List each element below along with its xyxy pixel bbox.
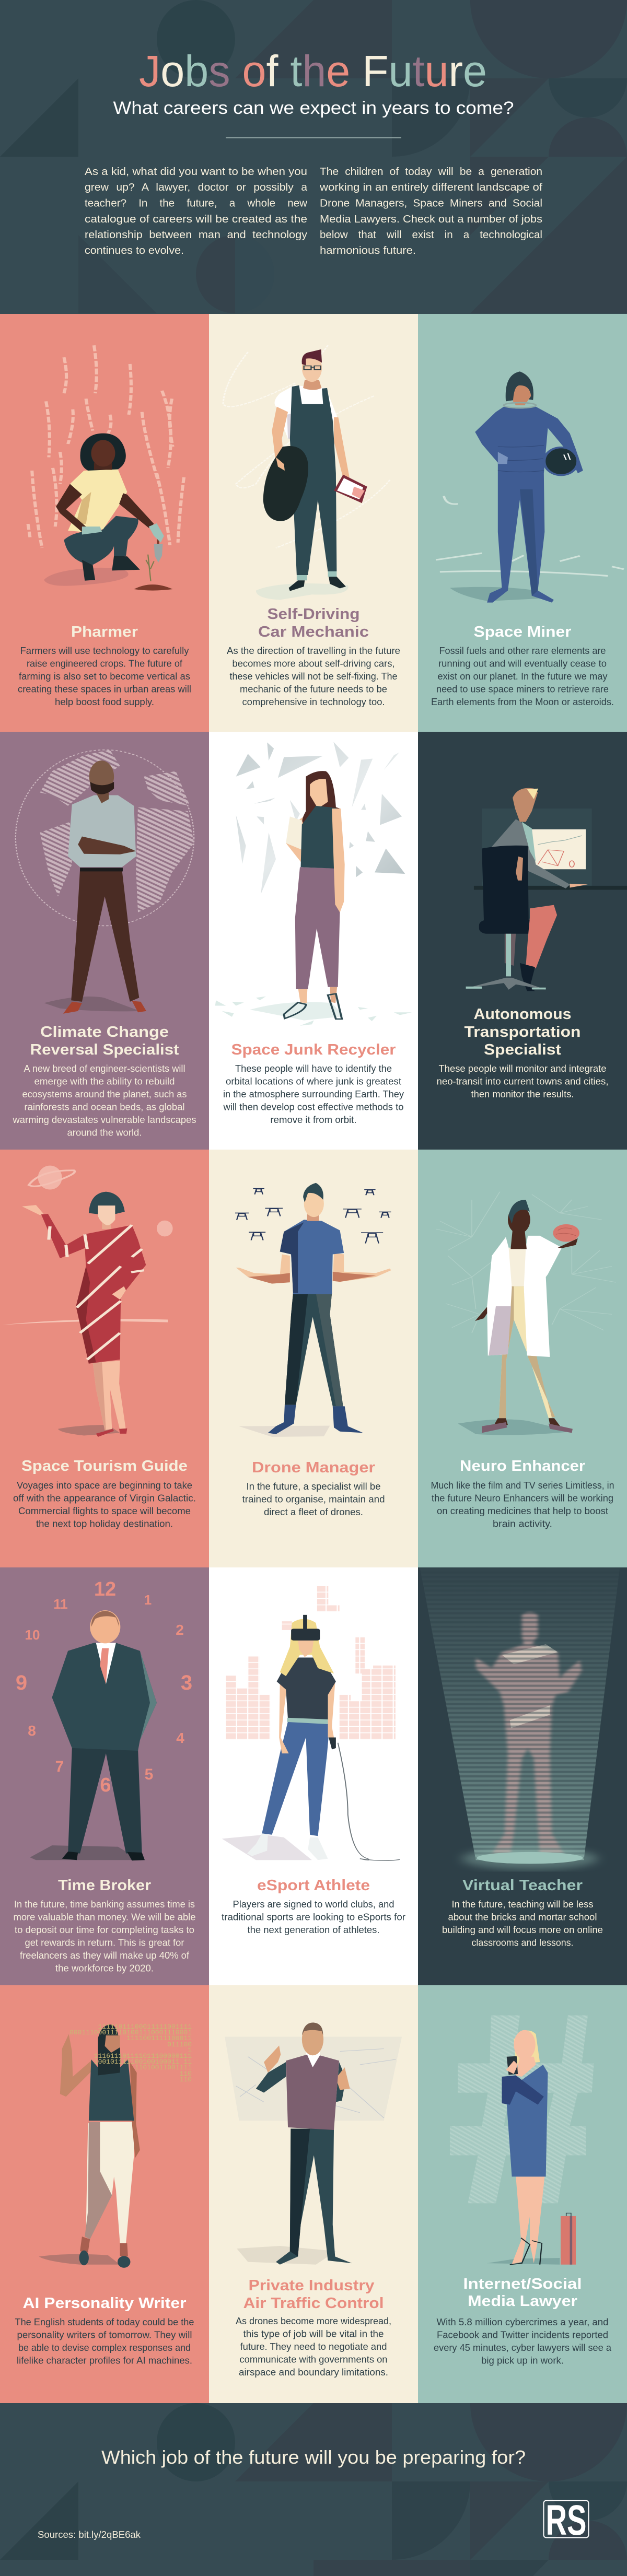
description: orbital locations of where junk is greatest bbox=[226, 1076, 401, 1086]
heading: Autonomous bbox=[473, 1006, 572, 1023]
panel: virtual teacher bbox=[418, 1567, 627, 1985]
description bbox=[227, 646, 400, 707]
intro text left column bbox=[85, 166, 308, 256]
heading: Drone Manager bbox=[252, 1459, 375, 1476]
description: As drones become more widespread, bbox=[236, 2316, 391, 2326]
description: the future Neuro Enhancers will be working bbox=[432, 1493, 613, 1503]
description: to deposit our time for completing tasks to bbox=[15, 1925, 194, 1935]
heading: eSport Athlete bbox=[257, 1877, 370, 1894]
description: in the atmosphere surrounding Earth. They bbox=[223, 1089, 404, 1099]
binary code: 1 bbox=[188, 2046, 192, 2054]
clock numbers: 3 bbox=[181, 1671, 192, 1694]
heading: AI Personality Writer bbox=[23, 2295, 186, 2312]
description: comprehensive in technology too. bbox=[242, 697, 385, 707]
description: big pick up in work. bbox=[481, 2356, 564, 2366]
binary code: 11111011100011111001111 bbox=[98, 2023, 192, 2031]
title: Jobs of the Future bbox=[139, 46, 487, 96]
description: These people will monitor and integrate bbox=[439, 1063, 606, 1074]
description: As the direction of travelling in the future bbox=[227, 646, 400, 656]
panel: time broker bbox=[0, 1567, 209, 1985]
intro text right column: below that will exist in a technological bbox=[320, 229, 542, 241]
panel: ai personality writer bbox=[0, 1985, 209, 2403]
heading: Self-Driving bbox=[268, 606, 359, 623]
heading: Internet/Social bbox=[463, 2276, 582, 2292]
description: These people will have to identify the bbox=[235, 1063, 392, 1074]
intro text left column: grew up? A lawyer, doctor or possibly a bbox=[85, 182, 308, 193]
description: running out and will eventually cease to bbox=[438, 658, 607, 669]
panel: internet and social media lawyer bbox=[418, 1985, 627, 2403]
panel: neuro enhancer bbox=[418, 1150, 627, 1567]
clock numbers bbox=[16, 1578, 192, 1796]
description: creating these spaces in urban areas will bbox=[18, 684, 191, 695]
description: about the bricks and mortar school bbox=[448, 1912, 597, 1922]
closing question: Which job of the future will you be preparing for? bbox=[101, 2446, 526, 2468]
description: around the world. bbox=[67, 1127, 142, 1138]
illustration: climate specialist bbox=[16, 750, 194, 1014]
illustration: space junk recycler bbox=[215, 742, 412, 1026]
footer panel bbox=[0, 2403, 627, 2576]
illustration: esport athlete bbox=[222, 1586, 400, 1860]
illustration: air traffic controller bbox=[225, 2022, 402, 2265]
panel: self-driving car mechanic bbox=[209, 314, 418, 732]
heading: Car Mechanic bbox=[258, 624, 369, 640]
binary code: 000111000111101001110001110001 bbox=[69, 2029, 192, 2036]
heading bbox=[258, 606, 369, 640]
intro text left column: As a kid, what did you want to be when you bbox=[85, 166, 307, 178]
description: becomes more about self-driving cars, bbox=[232, 658, 395, 669]
heading: Neuro Enhancer bbox=[460, 1458, 585, 1474]
description: raise engineered crops. The future of bbox=[27, 658, 183, 669]
clock numbers: 1 bbox=[144, 1592, 152, 1608]
illustration: neuro enhancer bbox=[436, 1192, 616, 1435]
description bbox=[18, 646, 191, 707]
description bbox=[14, 1899, 195, 1973]
illustration: time broker bbox=[30, 1610, 157, 1860]
heading: Pharmer bbox=[71, 624, 138, 640]
description: direct a fleet of drones. bbox=[264, 1507, 363, 1517]
illustration: social media lawyer bbox=[450, 2016, 594, 2265]
description bbox=[15, 2317, 194, 2366]
description: be able to devise complex responses and bbox=[18, 2343, 191, 2353]
description: In the future, teaching will be less bbox=[451, 1899, 594, 1910]
clock numbers: 4 bbox=[176, 1730, 184, 1746]
description: every 45 minutes, cyber lawyers will see a bbox=[434, 2343, 612, 2353]
description: rainforests and ocean beds, as global bbox=[24, 1102, 185, 1113]
description bbox=[437, 1063, 608, 1099]
illustration: space miner bbox=[436, 371, 624, 603]
heading: Transportation bbox=[464, 1024, 581, 1040]
heading: Climate Change bbox=[40, 1024, 169, 1040]
illustration: pharmer bbox=[28, 345, 184, 591]
description: will then develop cost effective methods to bbox=[223, 1102, 403, 1113]
clock numbers: 5 bbox=[145, 1766, 153, 1783]
description bbox=[434, 2317, 612, 2366]
heading: Space Miner bbox=[473, 624, 572, 640]
description: the next generation of athletes. bbox=[248, 1925, 379, 1935]
description: brain activity. bbox=[493, 1519, 552, 1529]
description bbox=[431, 1480, 614, 1529]
binary code: 11010011001111 bbox=[135, 2064, 192, 2071]
description bbox=[223, 1063, 404, 1125]
panel: drone manager bbox=[209, 1150, 418, 1567]
heading: Space Tourism Guide bbox=[21, 1458, 188, 1474]
illustration: drone manager bbox=[235, 1183, 391, 1437]
clock numbers: 10 bbox=[25, 1627, 40, 1643]
panel: pharmer bbox=[0, 314, 209, 732]
description: get rewards in return. This is great for bbox=[25, 1938, 184, 1948]
panel: climate change reversal specialist bbox=[0, 732, 209, 1150]
heading bbox=[463, 2276, 582, 2310]
intro text right column bbox=[319, 166, 542, 256]
heading: Air Traffic Control bbox=[243, 2295, 384, 2312]
panel: space miner bbox=[418, 314, 627, 732]
description: personality writers of tomorrow. They will bbox=[17, 2329, 192, 2340]
description: then monitor the results. bbox=[471, 1089, 574, 1099]
description bbox=[12, 1063, 196, 1138]
description: ecosystems around the planet, such as bbox=[22, 1089, 187, 1099]
heading: Virtual Teacher bbox=[462, 1877, 583, 1894]
description: this type of job will be vital in the bbox=[243, 2328, 384, 2339]
description: freelancers as they will make up 40% of bbox=[20, 1950, 190, 1961]
description: need to use space miners to retrieve rare bbox=[436, 684, 609, 695]
clock numbers: 12 bbox=[94, 1578, 116, 1600]
description: A new breed of engineer-scientists will bbox=[24, 1063, 185, 1074]
description: help boost food supply. bbox=[55, 697, 154, 707]
description: building and will focus more on online bbox=[442, 1925, 603, 1935]
intro text right column: The children of today will be a generation bbox=[320, 166, 542, 178]
header panel bbox=[0, 0, 627, 314]
panel: space tourism guide bbox=[0, 1150, 209, 1567]
heading bbox=[243, 2277, 384, 2312]
clock numbers: 6 bbox=[100, 1774, 111, 1796]
heading: Specialist bbox=[484, 1041, 561, 1058]
binary code: 111611101111011100000111 bbox=[94, 2052, 192, 2060]
description: these vehicles will not be self-fixing. The bbox=[230, 671, 397, 682]
description: farming is also set to become vertical as bbox=[19, 671, 190, 682]
illustration: transport specialist bbox=[466, 788, 627, 991]
description: Commercial flights to space will become bbox=[18, 1506, 191, 1516]
description: traditional sports are looking to eSports for bbox=[222, 1912, 405, 1922]
description: In the future, a specialist will be bbox=[247, 1481, 380, 1492]
description: neo-transit into current towns and cities, bbox=[437, 1076, 608, 1086]
description: Fossil fuels and other rare elements are bbox=[439, 646, 606, 656]
heading bbox=[464, 1006, 581, 1058]
subtitle: What careers can we expect in years to come? bbox=[113, 98, 514, 118]
description: Much like the film and TV series Limitless, in bbox=[431, 1480, 614, 1491]
binary code bbox=[69, 2023, 192, 2083]
intro text right column: Drone Managers, Space Miners and Social bbox=[320, 197, 542, 209]
logo: RS: RS bbox=[545, 2497, 586, 2544]
intro text right column: working in an entirely different landscape of bbox=[319, 182, 542, 193]
description bbox=[222, 1899, 405, 1935]
description: trained to organise, maintain and bbox=[242, 1494, 385, 1504]
sources: Sources: bit.ly/2qBE6ak bbox=[38, 2530, 141, 2540]
panel: esport athlete bbox=[209, 1567, 418, 1985]
clock numbers: 8 bbox=[28, 1723, 36, 1739]
description: exist on our planet. In the future we may bbox=[438, 671, 607, 682]
description: future. They need to negotiate and bbox=[240, 2341, 387, 2352]
description: lifelike character profiles for AI machines. bbox=[17, 2356, 192, 2366]
description: Earth elements from the Moon or asteroids. bbox=[431, 697, 614, 707]
description: communicate with governments on bbox=[239, 2355, 388, 2365]
intro text left column: relationship between man and technology bbox=[85, 229, 307, 241]
description: remove it from orbit. bbox=[271, 1115, 356, 1125]
description: The English students of today could be the bbox=[15, 2317, 194, 2327]
illustration: virtual teacher bbox=[420, 1567, 620, 1869]
illustration: mechanic bbox=[223, 345, 390, 600]
panel: space junk recycler bbox=[209, 732, 418, 1150]
logo: RS bbox=[543, 2497, 588, 2544]
description bbox=[13, 1480, 196, 1529]
binary code: 011100 bbox=[167, 2041, 192, 2048]
description bbox=[442, 1899, 603, 1948]
clock numbers: 2 bbox=[176, 1622, 184, 1638]
binary code: 110 bbox=[180, 2070, 192, 2078]
description bbox=[431, 646, 614, 707]
description: Players are signed to world clubs, and bbox=[233, 1899, 394, 1910]
intro text left column: continues to evolve. bbox=[85, 245, 184, 256]
intro text right column: Media Lawyers. Check out a number of jobs bbox=[320, 214, 542, 225]
heading bbox=[30, 1024, 179, 1058]
binary code: 100101111100100100011 11 bbox=[94, 2058, 192, 2066]
intro text right column: harmonious future. bbox=[320, 245, 416, 256]
description: Voyages into space are beginning to take bbox=[17, 1480, 192, 1491]
clock numbers: 11 bbox=[53, 1596, 68, 1612]
description: With 5.8 million cybercrimes a year, and bbox=[437, 2317, 608, 2327]
description: the next top holiday destination. bbox=[36, 1519, 173, 1529]
heading: Private Industry bbox=[249, 2277, 374, 2294]
description: on creating medicines that help to boost bbox=[437, 1506, 608, 1516]
illustration: space tourism guide bbox=[2, 1166, 173, 1437]
heading: Reversal Specialist bbox=[30, 1041, 179, 1058]
description: off with the appearance of Virgin Galactic. bbox=[13, 1493, 196, 1503]
heading: Media Lawyer bbox=[468, 2293, 577, 2310]
clock numbers: 7 bbox=[55, 1758, 64, 1775]
panel: private industry air traffic control bbox=[209, 1985, 418, 2403]
heading: Space Junk Recycler bbox=[231, 1041, 396, 1058]
description: warming devastates vulnerable landscapes bbox=[12, 1115, 196, 1125]
clock numbers: 9 bbox=[16, 1671, 27, 1694]
description: airspace and boundary limitations. bbox=[239, 2367, 388, 2378]
intro text left column: catalogue of careers will be created as the bbox=[85, 214, 307, 225]
description: more valuable than money. We will be able bbox=[14, 1912, 195, 1922]
intro text left column: teacher? In the future, a whole new bbox=[85, 197, 308, 209]
description: Farmers will use technology to carefully bbox=[20, 646, 189, 656]
description: emerge with the ability to rebuild bbox=[34, 1076, 175, 1086]
binary code: 1111001111100011 bbox=[126, 2034, 192, 2042]
illustration: ai personality writer bbox=[39, 2024, 140, 2268]
panel: autonomous transportation specialist bbox=[418, 732, 627, 1150]
description: Facebook and Twitter incidents reported bbox=[437, 2329, 608, 2340]
binary code: 110 bbox=[180, 2076, 192, 2083]
description: In the future, time banking assumes time is bbox=[14, 1899, 195, 1910]
description bbox=[242, 1481, 385, 1517]
description bbox=[236, 2316, 391, 2378]
description: the workforce by 2020. bbox=[55, 1963, 154, 1973]
heading: Time Broker bbox=[58, 1877, 151, 1894]
description: mechanic of the future needs to be bbox=[240, 684, 387, 695]
description: classrooms and lessons. bbox=[471, 1938, 574, 1948]
